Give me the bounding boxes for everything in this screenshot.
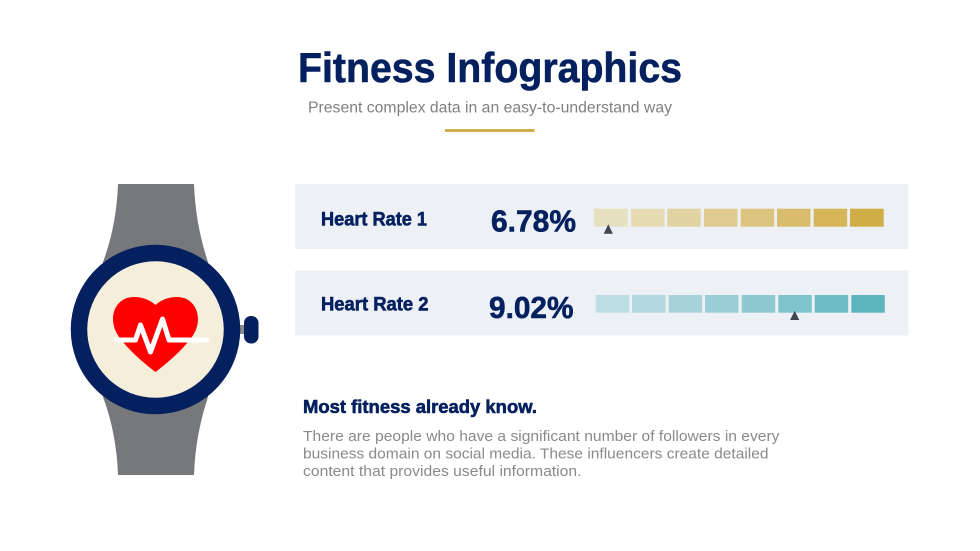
panel: heart rate 1	[295, 184, 908, 249]
value: 6.78%: 6.78%	[491, 204, 576, 238]
watch case	[79, 253, 232, 406]
title underline	[445, 129, 534, 132]
text block body: There are people who have a significant number of followers in every	[303, 429, 780, 445]
text block body	[303, 429, 780, 480]
marker triangle	[604, 224, 613, 234]
pulse line	[116, 319, 207, 352]
heart	[113, 297, 198, 372]
label: heart rate 1: Heart Rate 1	[321, 210, 427, 230]
text block heading: Most fitness already know.	[303, 396, 537, 417]
value: 9.02%: 9.02%	[489, 290, 574, 325]
watch strap	[103, 184, 208, 475]
watch crown	[240, 316, 258, 344]
subtitle: Present complex data in an easy-to-understand way	[308, 100, 672, 116]
panel: heart rate 2	[295, 270, 908, 336]
gold scale bar	[594, 209, 884, 227]
text block body: business domain on social media. These influencers create detailed	[303, 446, 768, 462]
marker triangle	[790, 311, 799, 320]
label: heart rate 2: Heart Rate 2	[321, 295, 428, 316]
text block body: content that provides useful information.	[303, 464, 582, 480]
teal scale bar	[596, 295, 885, 313]
title: Fitness Infographics	[298, 44, 682, 91]
icon: smartwatch with heart rate	[79, 184, 258, 475]
